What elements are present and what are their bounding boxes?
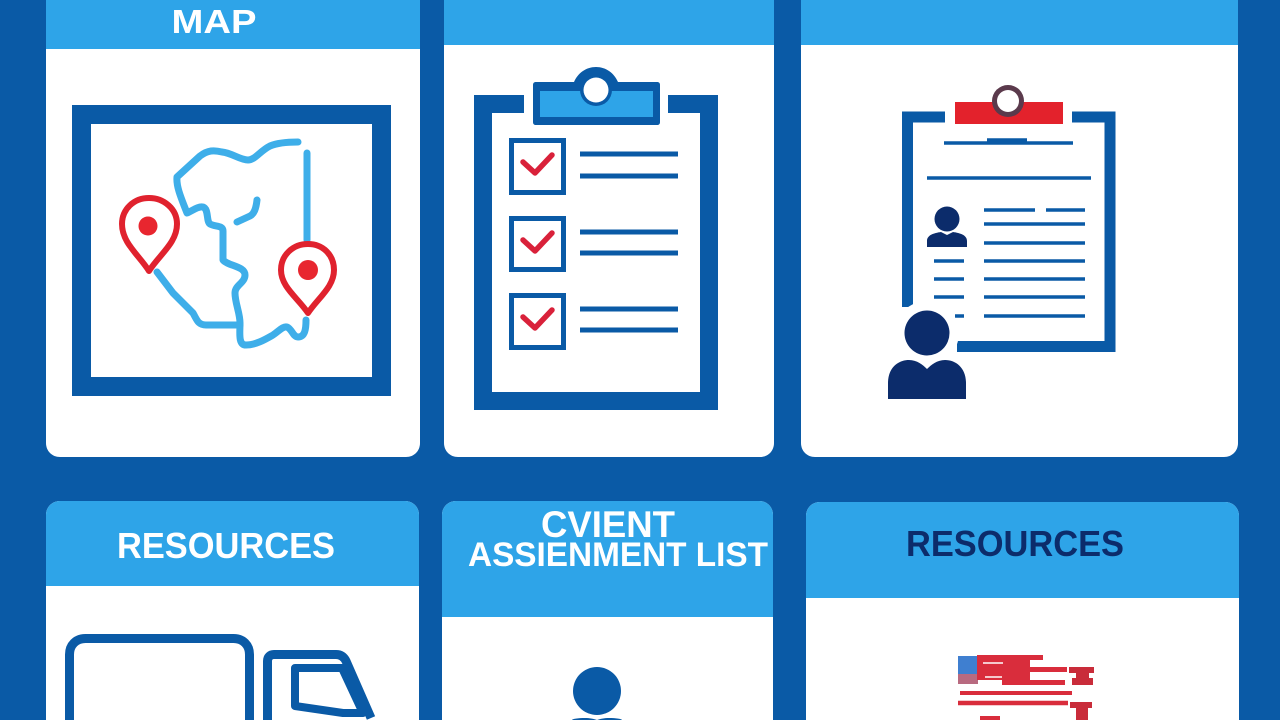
heading: client assignment list <box>468 504 768 574</box>
heading: client assignment list: CVIENT <box>541 504 675 545</box>
heading: resources dark: RESOURCES <box>906 523 1124 564</box>
panel: resources flag <box>806 502 1239 720</box>
icon: clipboard checklist <box>483 67 709 401</box>
heading: client assignment list: ASSIENMENT LIST <box>468 536 768 574</box>
heading: map: MAP <box>172 3 256 40</box>
document text lines <box>927 140 1091 316</box>
icon: right map pin <box>281 244 334 313</box>
icon: clipboard with client profile <box>888 85 1110 399</box>
resources header dark <box>806 502 1239 598</box>
icon: truck <box>70 638 371 720</box>
panel: resources truck <box>46 501 419 720</box>
checklist panel header <box>444 0 774 45</box>
checklist row 1 <box>512 140 678 192</box>
red clipboard clip <box>955 85 1063 124</box>
panel: client record <box>801 0 1238 457</box>
icon: flag <box>958 655 1094 720</box>
heading: resources: RESOURCES <box>117 525 335 566</box>
clipboard clip <box>533 67 660 125</box>
icon: person <box>572 667 622 720</box>
icon: small profile figure <box>927 206 967 247</box>
resources header <box>46 501 419 586</box>
client record panel header <box>801 0 1238 45</box>
icon: left map pin <box>122 198 177 271</box>
icon: large person <box>888 301 966 399</box>
icon: map with pins <box>82 114 382 386</box>
checklist row 2 <box>512 218 678 270</box>
map panel header <box>46 0 420 49</box>
panel: map <box>46 0 420 457</box>
panel: client assignment list <box>442 501 773 720</box>
client assignment list header <box>442 501 773 617</box>
panel: checklist <box>444 0 774 457</box>
checklist row 3 <box>512 296 678 348</box>
